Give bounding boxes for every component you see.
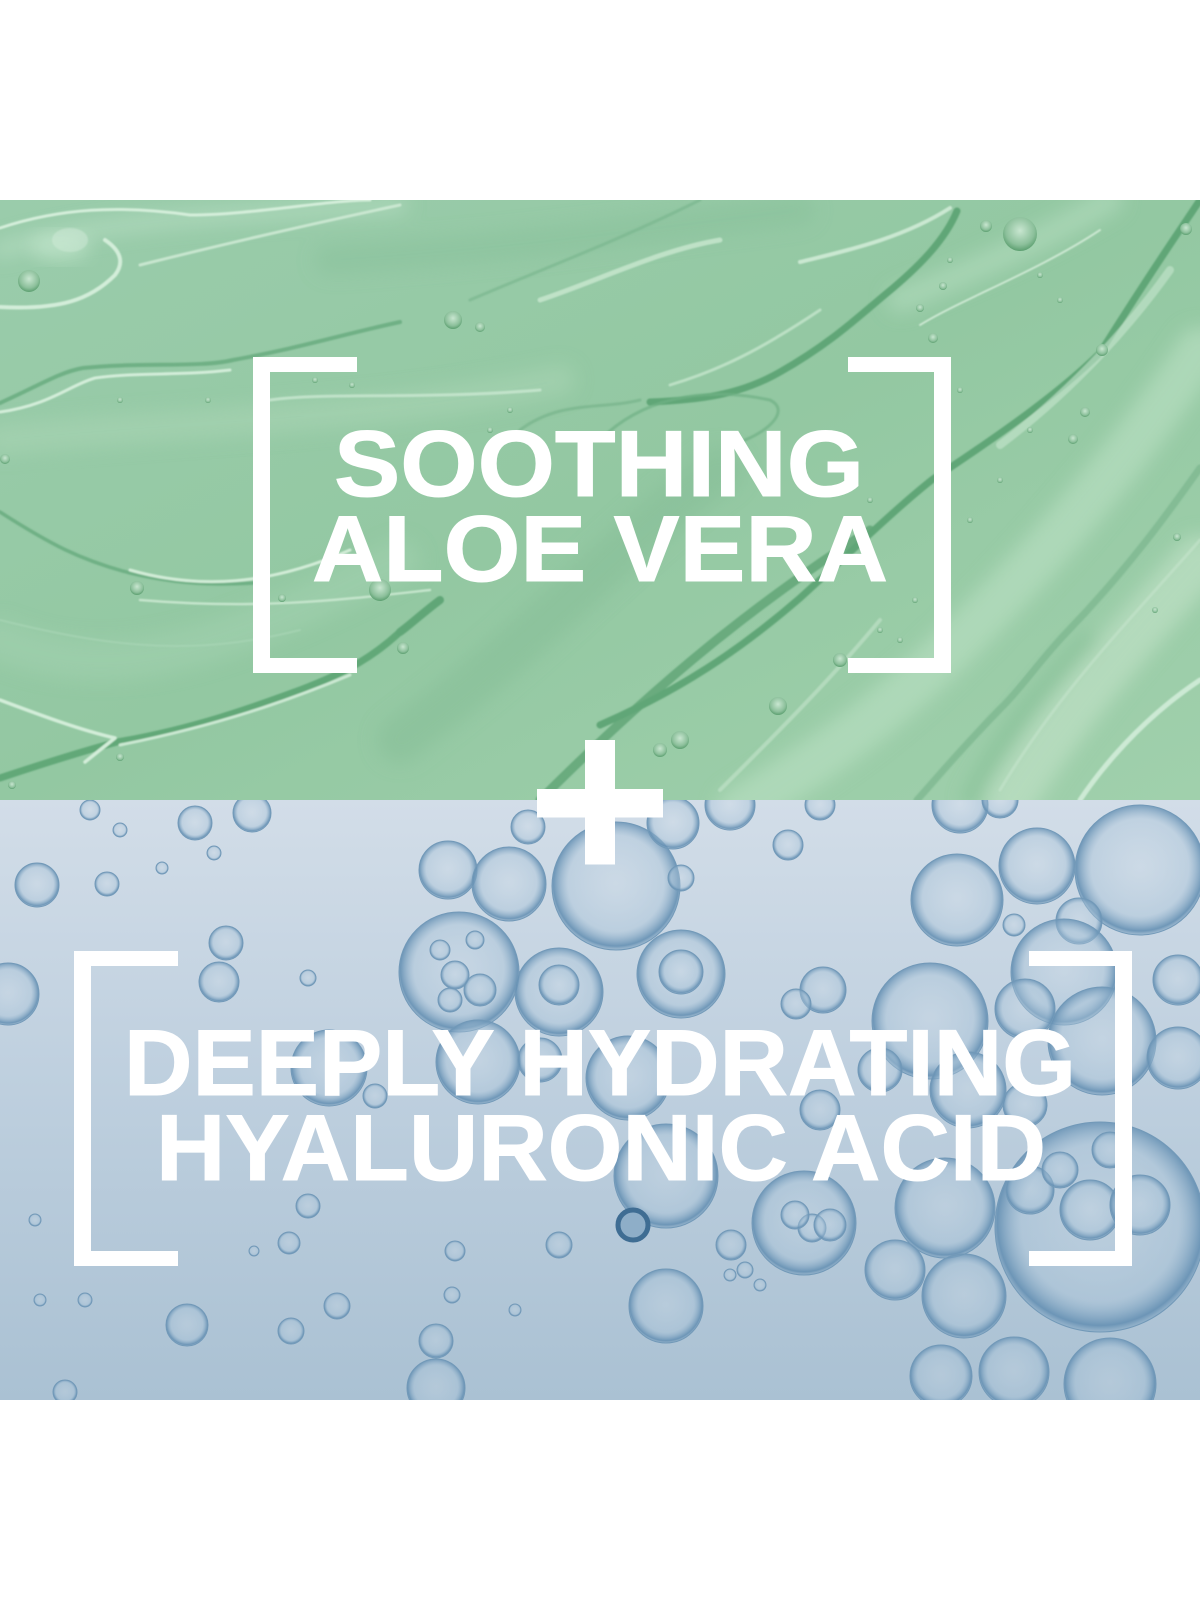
dark bubble: [618, 1210, 648, 1240]
heading: deeply hydrating hyaluronic acid: DEEPLY HYDRATING: [124, 1010, 1076, 1115]
panel: aloe vera gel texture: [0, 200, 1200, 810]
bubbles: [0, 777, 1200, 1430]
heading: soothing aloe vera: ALOE VERA: [312, 496, 888, 601]
heading: deeply hydrating hyaluronic acid: HYALURONIC ACID: [156, 1095, 1046, 1200]
panel: hyaluronic acid bubbles texture: [0, 777, 1200, 1430]
heading: soothing aloe vera: [312, 411, 888, 601]
dark ridges: [600, 200, 1200, 725]
bracket: aloe vera frame: [253, 357, 951, 673]
light highlights: [0, 240, 120, 308]
icon: plus sign: [537, 740, 663, 864]
gel droplets: [0, 217, 1192, 789]
heading: deeply hydrating hyaluronic acid: [124, 1010, 1076, 1200]
heading: soothing aloe vera: SOOTHING: [334, 411, 864, 516]
bracket: hyaluronic acid frame: [74, 951, 1132, 1266]
